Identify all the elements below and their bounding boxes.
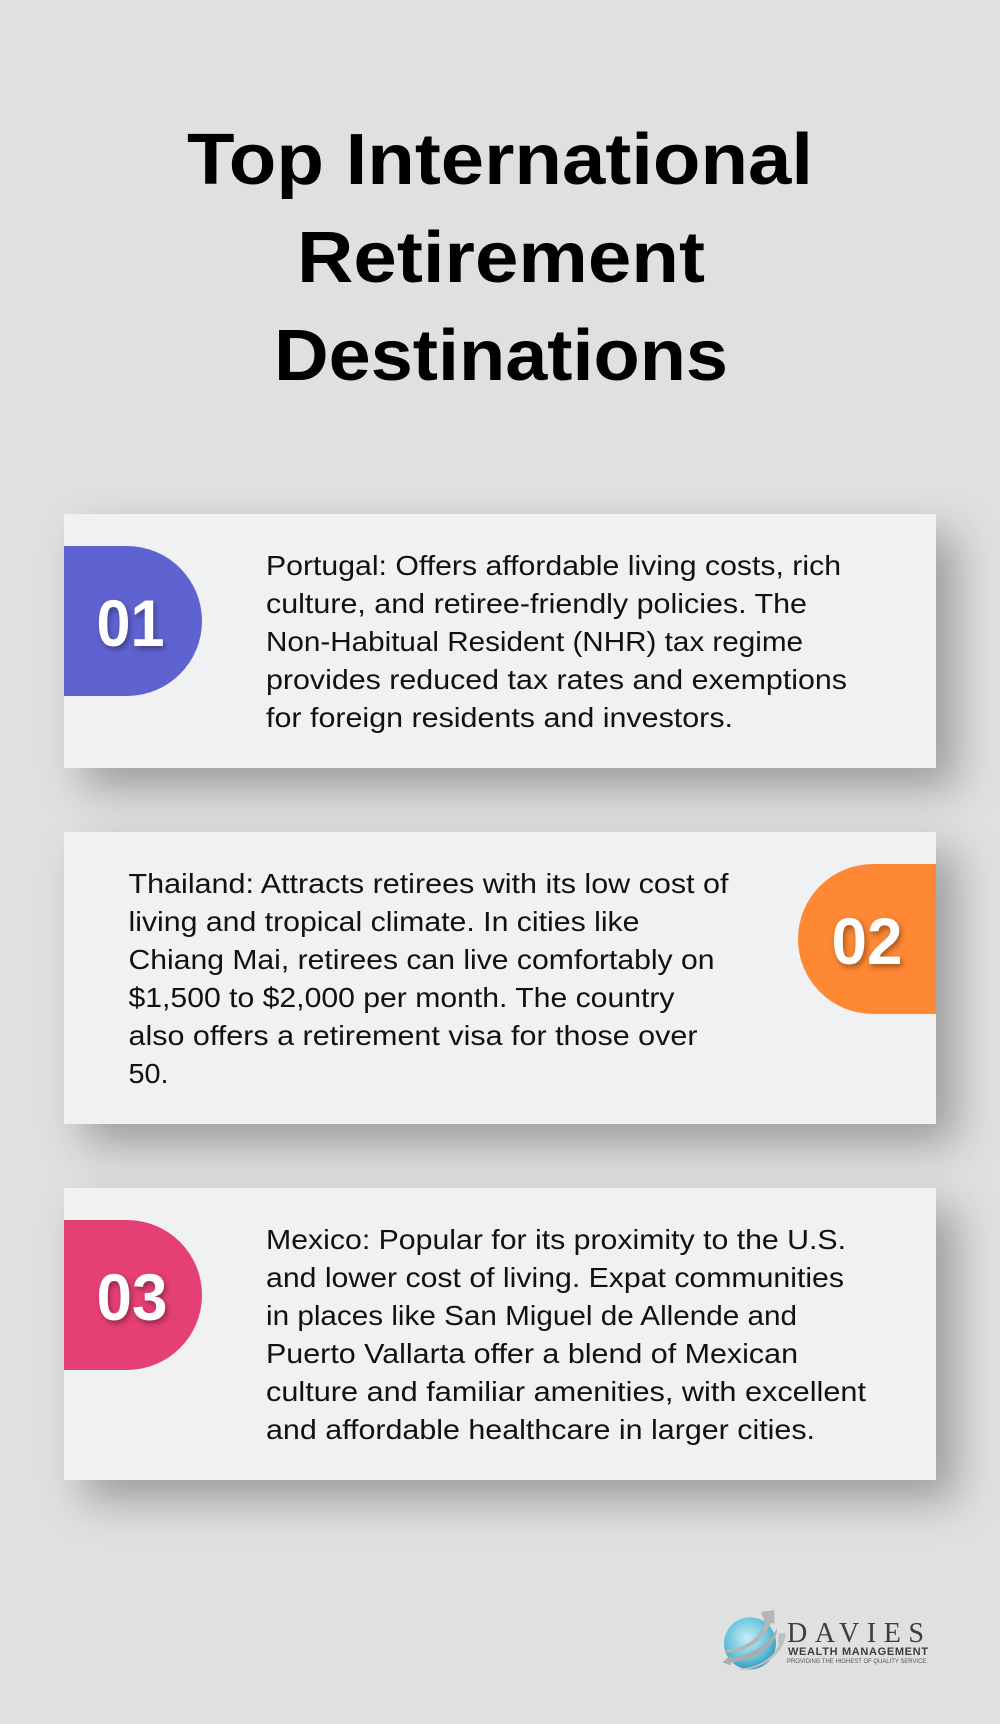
text: Thailand description: also offers a retirement visa for those over: [128, 1020, 698, 1051]
text: Mexico description: Mexico: Popular for its proximity to the U.S.: [266, 1224, 846, 1255]
tagline: PROVIDING THE HIGHEST OF QUALITY SERVICE.: [787, 1658, 928, 1665]
text: Portugal description: Non-Habitual Resident (NHR) tax regime: [266, 626, 803, 657]
text: Mexico description: and affordable healthcare in larger cities.: [266, 1414, 815, 1445]
number 01: 01: [96, 586, 164, 660]
panel: Mexico: [64, 1188, 936, 1480]
panel: Portugal: [64, 514, 936, 768]
text: Portugal description: Portugal: Offers affordable living costs, rich: [266, 550, 841, 581]
text: Thailand description: Chiang Mai, retirees can live comfortably on: [128, 944, 714, 975]
badge 02: [798, 864, 936, 1014]
title: Retirement: [297, 218, 705, 298]
number 03: 03: [96, 1260, 168, 1334]
text: Portugal description: [266, 550, 847, 733]
text: Thailand description: [128, 868, 729, 1089]
text: Mexico description: Puerto Vallarta offer a blend of Mexican: [266, 1338, 798, 1369]
text: Portugal description: culture, and retiree-friendly policies. The: [266, 588, 807, 619]
text: Mexico description: culture and familiar amenities, with excellent: [266, 1376, 866, 1407]
badge 03: [64, 1220, 202, 1370]
text: Thailand description: $1,500 to $2,000 per month. The country: [128, 982, 674, 1013]
title: Destinations: [274, 316, 728, 396]
number 02: 02: [832, 904, 902, 978]
text: Thailand description: Thailand: Attracts retirees with its low cost of: [128, 868, 729, 899]
text: Portugal description: provides reduced tax rates and exemptions: [266, 664, 847, 695]
text: Portugal description: for foreign residents and investors.: [266, 702, 733, 733]
wordmark DAVIES: DAVIES: [787, 1618, 924, 1649]
text: Mexico description: in places like San Miguel de Allende and: [266, 1300, 797, 1331]
text: Thailand description: 50.: [128, 1058, 168, 1089]
text: Mexico description: [266, 1224, 866, 1445]
wordmark WEALTH MANAGEMENT: WEALTH MANAGEMENT: [788, 1646, 928, 1658]
panel: Thailand: [64, 832, 936, 1124]
badge 01: [64, 546, 202, 696]
title: [187, 120, 813, 396]
text: Mexico description: and lower cost of living. Expat communities: [266, 1262, 844, 1293]
title: Top International: [187, 120, 813, 200]
text: Thailand description: living and tropical climate. In cities like: [128, 906, 640, 937]
icon: globe with arrows: [722, 1610, 786, 1670]
